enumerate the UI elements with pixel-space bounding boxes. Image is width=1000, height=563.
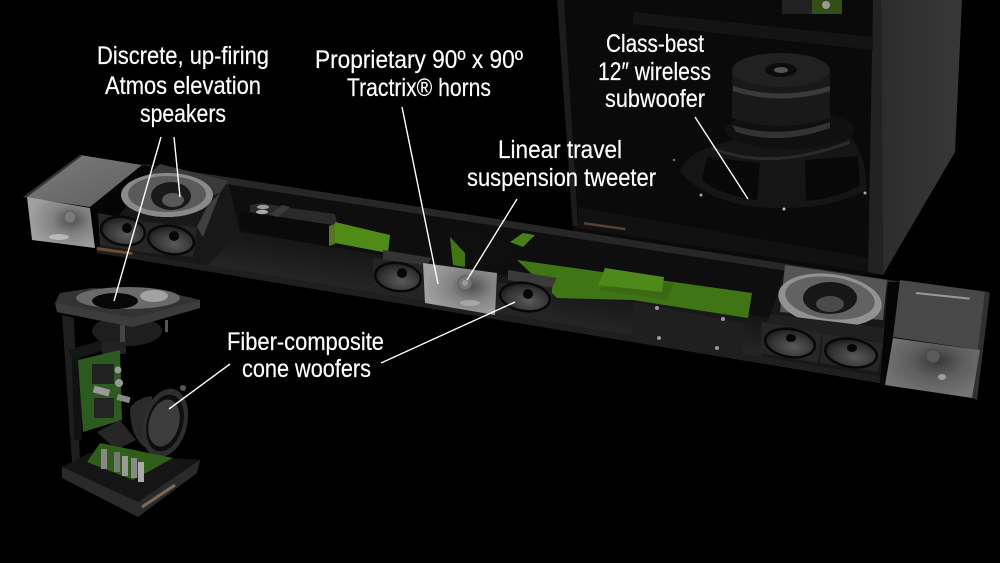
center right woofer bbox=[498, 270, 557, 317]
satellite transformer block bbox=[97, 420, 136, 450]
satellite top speaker plate bbox=[55, 287, 200, 327]
right end cap bbox=[880, 280, 990, 400]
line: tweeter bbox=[467, 199, 517, 280]
right up-firing driver bbox=[775, 265, 887, 332]
satellite side panel bbox=[62, 315, 80, 462]
right oval woofers bbox=[760, 314, 885, 372]
satellite circuit board bbox=[78, 350, 131, 432]
front lip bbox=[97, 247, 885, 384]
callout: tractrix horns: Proprietary 90º x 90º bbox=[315, 46, 523, 74]
subwoofer cabinet bbox=[557, 0, 962, 275]
satellite base bbox=[62, 443, 200, 517]
callout: tractrix horns: Tractrix® horns bbox=[347, 74, 491, 102]
line: subwoofer bbox=[695, 117, 748, 199]
center left woofer bbox=[373, 250, 432, 297]
cabinet logo bbox=[584, 222, 626, 230]
rail bbox=[142, 164, 903, 289]
green board center bbox=[447, 227, 752, 318]
callout: subwoofer bbox=[598, 30, 711, 113]
bar body bbox=[97, 164, 903, 383]
callout: subwoofer: subwoofer bbox=[605, 85, 705, 113]
leader lines bbox=[114, 107, 748, 409]
line: atmos elevation right bbox=[174, 137, 180, 197]
soundbar bbox=[23, 155, 990, 400]
left end cap bbox=[23, 155, 160, 250]
satellite woofer bbox=[130, 383, 195, 463]
left up-firing driver bbox=[121, 164, 228, 237]
callout: tractrix horns bbox=[315, 46, 523, 102]
callout: atmos elevation speakers: Atmos elevation bbox=[105, 72, 261, 100]
plate with screws bbox=[632, 302, 743, 355]
line: woofer satellite bbox=[169, 364, 230, 409]
line: woofer center bbox=[381, 302, 515, 363]
callout: woofers: cone woofers bbox=[242, 355, 371, 383]
satellite connector rail bbox=[68, 340, 105, 360]
callout: subwoofer: 12″ wireless bbox=[598, 58, 711, 86]
satellite oval driver underside bbox=[92, 316, 168, 354]
line: atmos elevation left bbox=[114, 137, 161, 301]
callout: atmos elevation speakers bbox=[97, 42, 269, 128]
left oval woofers bbox=[98, 213, 197, 258]
callout: tweeter: Linear travel bbox=[498, 136, 622, 164]
satellite speaker bbox=[55, 287, 200, 517]
callout: atmos elevation speakers: speakers bbox=[140, 100, 226, 128]
inner back wall bbox=[228, 181, 785, 318]
circuit board in cabinet bbox=[782, 0, 842, 14]
callout: tweeter: suspension tweeter bbox=[467, 164, 656, 192]
amplifier module bbox=[240, 203, 390, 253]
line: horn bbox=[402, 107, 438, 284]
callout: woofers bbox=[227, 328, 384, 383]
subwoofer driver bbox=[673, 53, 866, 210]
callout: woofers: Fiber-composite bbox=[227, 328, 384, 356]
callout: tweeter bbox=[467, 136, 656, 192]
bar floor bbox=[205, 232, 770, 362]
callout: subwoofer: Class-best bbox=[606, 30, 704, 58]
callout: atmos elevation speakers: Discrete, up-firing bbox=[97, 42, 269, 70]
left logo bbox=[97, 247, 133, 255]
center horn bbox=[423, 263, 497, 315]
